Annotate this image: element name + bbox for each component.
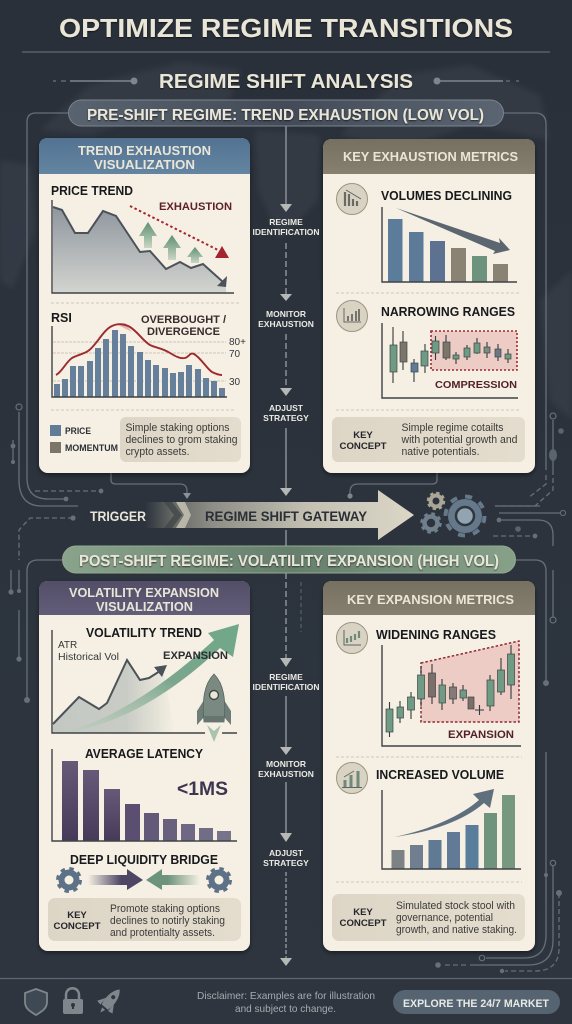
title: OPTIMIZE REGIME TRANSITIONS xyxy=(59,13,513,43)
central flow column: upper xyxy=(252,126,320,546)
disclaimer: and subject to change. xyxy=(235,1003,336,1015)
icon: gears xyxy=(422,493,484,536)
price trend chart: PRICE TREND xyxy=(51,184,133,198)
legend: MOMENTUM xyxy=(65,443,118,453)
key concept box: Promote staking options xyxy=(110,903,220,915)
volatility trend chart: VOLATILITY TREND xyxy=(86,626,202,640)
panel: volatility expansion visualization xyxy=(39,581,250,951)
average latency bar chart: <1MS xyxy=(177,778,228,800)
deep liquidity bridge: DEEP LIQUIDITY BRIDGE xyxy=(70,853,218,867)
volumes declining bar chart: VOLUMES DECLINING xyxy=(381,189,512,203)
panel: trend exhaustion visualization: TREND EXHAUSTION xyxy=(78,144,211,158)
note box: declines to grom staking xyxy=(126,434,238,446)
RSI chart: OVERBOUGHT / xyxy=(141,314,226,326)
footer icon: rocket xyxy=(93,983,127,1019)
key concept box: and protentialty assets. xyxy=(110,927,215,939)
regime shift gateway arrow: TRIGGER xyxy=(90,509,146,524)
key concept box: KEY xyxy=(353,907,373,918)
widening ranges candlestick chart: EXPANSION xyxy=(448,729,514,741)
legend: PRICE xyxy=(65,426,91,436)
panel: volatility expansion visualization: VOLATILITY EXPANSION xyxy=(69,586,219,600)
increased volume bar chart xyxy=(376,768,521,869)
key concept box xyxy=(332,894,525,941)
key concept box: CONCEPT xyxy=(340,441,387,452)
key concept box: KEY xyxy=(353,430,373,441)
world map texture xyxy=(0,62,572,420)
regime shift gateway arrow: REGIME SHIFT GATEWAY xyxy=(205,509,367,524)
RSI chart: 70 xyxy=(229,349,241,360)
narrowing ranges candlestick chart xyxy=(381,305,518,398)
panel: trend exhaustion visualization: VISUALIZATION xyxy=(94,158,195,172)
widening ranges candlestick chart: WIDENING RANGES xyxy=(376,628,496,642)
price trend chart xyxy=(51,184,234,293)
icon: bar chart xyxy=(336,300,368,332)
panel: key exhaustion metrics: KEY EXHAUSTION METRICS xyxy=(343,150,518,164)
icon: rising bars xyxy=(336,762,368,794)
key concept box: declines to notirly staking xyxy=(110,915,225,927)
key concept box: growth, and native staking. xyxy=(396,924,517,936)
central flow column: upper: MONITOR xyxy=(266,309,306,319)
icon: rocket xyxy=(197,674,231,742)
central flow column: upper: IDENTIFICATION xyxy=(252,227,320,237)
footer icon: lock xyxy=(63,988,83,1014)
note box xyxy=(120,417,241,462)
key concept box xyxy=(332,417,525,462)
central flow column: upper: ADJUST xyxy=(269,403,304,413)
footer icon: shield xyxy=(25,989,47,1015)
price trend chart: EXHAUSTION xyxy=(159,201,232,213)
central flow column: lower: REGIME xyxy=(269,672,303,682)
key concept box: KEY xyxy=(67,910,87,921)
explore button: EXPLORE THE 24/7 MARKET xyxy=(403,998,549,1010)
panel: trend exhaustion visualization xyxy=(39,138,250,473)
RSI chart: 80+ xyxy=(229,337,246,348)
panel: volatility expansion visualization: VISUALIZATION xyxy=(96,600,193,614)
central flow column: lower: STRATEGY xyxy=(263,858,309,868)
volatility trend chart: Historical Vol xyxy=(58,652,119,663)
pre-shift banner xyxy=(68,100,504,126)
regime shift gateway arrow xyxy=(90,490,414,540)
RSI chart: RSI xyxy=(51,311,72,325)
narrowing ranges candlestick chart: COMPRESSION xyxy=(435,379,517,391)
widening ranges candlestick chart xyxy=(376,628,521,746)
note box: Simple staking options xyxy=(126,422,230,434)
disclaimer: Disclaimer: Examples are for illustration xyxy=(197,990,375,1002)
increased volume bar chart: INCREASED VOLUME xyxy=(376,768,504,782)
icon: widening chart xyxy=(336,622,368,654)
central flow column: upper: REGIME xyxy=(269,217,303,227)
subtitle: REGIME SHIFT ANALYSIS xyxy=(159,71,413,93)
key concept box: Simulated stock stool with xyxy=(396,900,515,912)
central flow column: lower: ADJUST xyxy=(269,848,304,858)
RSI chart xyxy=(51,311,246,397)
key concept box: CONCEPT xyxy=(54,921,101,932)
note box: crypto assets. xyxy=(126,446,190,458)
narrowing ranges candlestick chart: NARROWING RANGES xyxy=(381,305,515,319)
central flow column: lower xyxy=(252,573,320,966)
legend xyxy=(50,425,118,453)
average latency bar chart xyxy=(52,747,237,841)
post-shift banner xyxy=(62,546,516,573)
panel: key exhaustion metrics xyxy=(323,139,535,473)
volatility trend chart: EXPANSION xyxy=(163,650,228,662)
pre-shift banner: PRE-SHIFT REGIME: TREND EXHAUSTION (LOW VOL) xyxy=(87,107,484,124)
key concept box: governance, potential xyxy=(396,912,493,924)
subtitle xyxy=(53,71,519,93)
average latency bar chart: AVERAGE LATENCY xyxy=(85,747,204,761)
central flow column: upper: EXHAUSTION xyxy=(258,319,314,329)
volatility trend chart: ATR xyxy=(58,640,77,651)
key concept box: native potentials. xyxy=(402,446,480,458)
RSI chart: DIVERGENCE xyxy=(147,326,220,338)
deep liquidity bridge xyxy=(58,853,230,892)
icon: declining bars xyxy=(336,184,368,214)
panel: key expansion metrics: KEY EXPANSION METRICS xyxy=(347,593,514,607)
key concept box: CONCEPT xyxy=(340,918,387,929)
RSI chart: 30 xyxy=(229,377,241,388)
key concept box: Simple regime cotailts xyxy=(402,422,504,434)
central flow column: lower: EXHAUSTION xyxy=(258,769,314,779)
panel: key expansion metrics xyxy=(323,581,535,951)
disclaimer xyxy=(197,990,375,1015)
explore button xyxy=(393,990,560,1014)
key concept box: with potential growth and xyxy=(401,434,518,446)
central flow column: lower: MONITOR xyxy=(266,759,306,769)
post-shift banner: POST-SHIFT REGIME: VOLATILITY EXPANSION (HIGH VOL) xyxy=(79,553,499,570)
central flow column: upper: STRATEGY xyxy=(263,413,309,423)
central flow column: lower: IDENTIFICATION xyxy=(252,682,320,692)
volatility trend chart xyxy=(52,624,239,733)
volumes declining bar chart xyxy=(381,189,517,282)
key concept box xyxy=(48,898,241,941)
